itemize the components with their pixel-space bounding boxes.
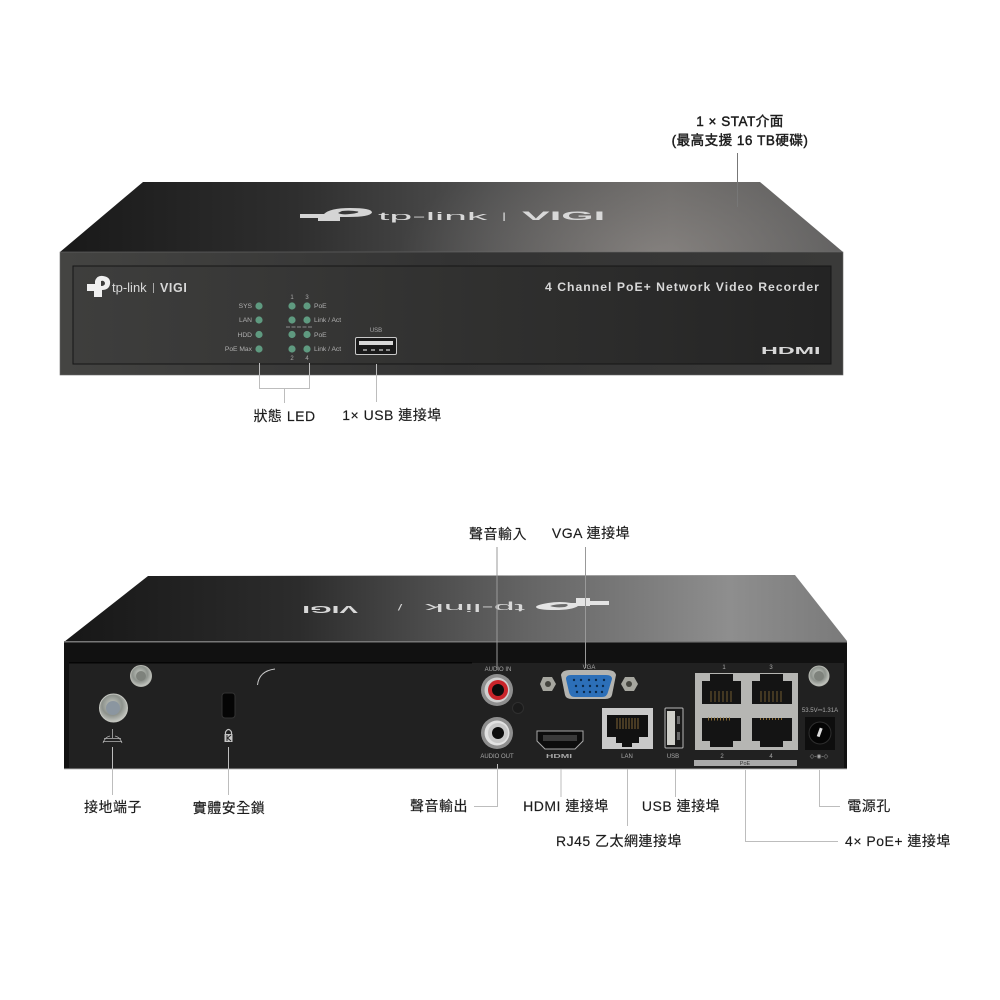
top logo front: VIGI: [522, 209, 605, 223]
status LEDs: PoE: [314, 332, 327, 339]
callout: status LED: 狀態 LED: [253, 408, 316, 424]
status LEDs: Link / Act: [314, 317, 341, 324]
callout: STAT: 1 × STAT介面: [696, 114, 784, 129]
rear USB port: [665, 708, 683, 760]
PoE ports: 3: [769, 665, 773, 671]
HDMI port: [537, 731, 583, 759]
NVR front view: [60, 182, 843, 375]
rear body: [64, 641, 847, 769]
top logo front: [300, 208, 605, 223]
top logo rear: /: [397, 602, 402, 613]
panel logo tp-link VIGI: [87, 276, 187, 297]
front USB port: USB: [370, 328, 382, 334]
top face of rear unit: [64, 575, 847, 642]
audio out port: AUDIO OUT: [480, 754, 514, 760]
callout: PoE: [746, 770, 951, 849]
power jack: [802, 708, 838, 760]
panel logo tp-link VIGI: VIGI: [160, 281, 187, 295]
VGA port: VGA: [583, 665, 595, 671]
callout: audio in: 聲音輸入: [469, 526, 527, 542]
callout: ground: [84, 747, 142, 815]
callout: STAT: [672, 114, 808, 207]
PoE ports: PoE: [740, 761, 751, 767]
top logo front: tp-link: [378, 210, 489, 223]
callout: status LED: [253, 363, 316, 424]
callout: STAT: (最高支援 16 TB硬碟): [672, 132, 808, 148]
lock icon: [224, 730, 232, 742]
PoE ports: 2: [720, 754, 724, 760]
callout: USB: [642, 769, 720, 814]
status LEDs: 4: [305, 356, 309, 362]
power jack: 53.5V⎓1.31A: [802, 708, 838, 714]
VGA port: [540, 665, 638, 699]
status LEDs: PoE Max: [225, 346, 253, 353]
callout: VGA: VGA 連接埠: [552, 525, 630, 541]
status LEDs: PoE: [314, 303, 327, 310]
PoE ports: [694, 665, 798, 767]
callout: USB: USB 連接埠: [642, 798, 720, 814]
callout: RJ45: [556, 769, 682, 849]
audio in port: AUDIO IN: [485, 667, 511, 673]
LAN port: LAN: [621, 754, 633, 760]
callout: audio out: [410, 764, 498, 814]
callout: PoE: 4× PoE+ 連接埠: [845, 833, 951, 849]
audio in port: [481, 667, 513, 706]
status LEDs: 1: [290, 295, 294, 301]
callout: front USB: 1× USB 連接埠: [342, 407, 442, 423]
NVR rear view: [64, 575, 847, 769]
top face of front unit: [60, 182, 843, 252]
PoE ports: 4: [769, 754, 773, 760]
panel logo tp-link VIGI: tp-link: [112, 280, 147, 295]
top logo front: |: [502, 210, 506, 221]
front panel: [73, 266, 831, 364]
status LEDs: [225, 295, 341, 362]
LAN port: [602, 708, 653, 760]
audio out port: [480, 717, 514, 760]
model name: 4 Channel PoE+ Network Video Recorder: [545, 280, 820, 294]
callout: RJ45: RJ45 乙太網連接埠: [556, 833, 682, 849]
grounding screw: [100, 694, 128, 722]
callout: power: 電源孔: [847, 798, 891, 814]
power jack: ◇-◉-◇: [810, 754, 829, 760]
status LEDs: 2: [290, 356, 294, 362]
status LEDs: Link / Act: [314, 346, 341, 353]
status LEDs: LAN: [239, 317, 252, 324]
security lock slot: [222, 693, 235, 718]
arc mark: [258, 669, 275, 685]
ground symbol: [103, 729, 122, 743]
rear USB port: USB: [667, 754, 679, 760]
callout: audio out: 聲音輸出: [410, 798, 468, 814]
top logo rear: tp-link: [425, 602, 525, 614]
status LEDs: HDD: [238, 332, 252, 339]
rear panel: [69, 663, 844, 768]
callout: front USB: [342, 364, 442, 423]
status LEDs: 3: [305, 295, 309, 301]
top logo rear: VIGI: [302, 604, 358, 615]
screws: [130, 666, 152, 686]
callout: HDMI: HDMI 連接埠: [523, 798, 609, 814]
callout: security lock: 實體安全鎖: [193, 800, 265, 816]
top logo rear: [302, 598, 609, 615]
callout: security lock: [193, 747, 265, 816]
callout: power: [820, 770, 891, 814]
callout: HDMI: [523, 769, 609, 814]
status LEDs: SYS: [239, 303, 253, 310]
front bezel: [60, 252, 843, 375]
HDMI logo: HDMI: [761, 345, 821, 356]
HDMI port: HDMI: [546, 753, 572, 759]
front USB port: [356, 328, 396, 354]
PoE ports: 1: [722, 665, 726, 671]
callout: ground: 接地端子: [84, 799, 142, 815]
